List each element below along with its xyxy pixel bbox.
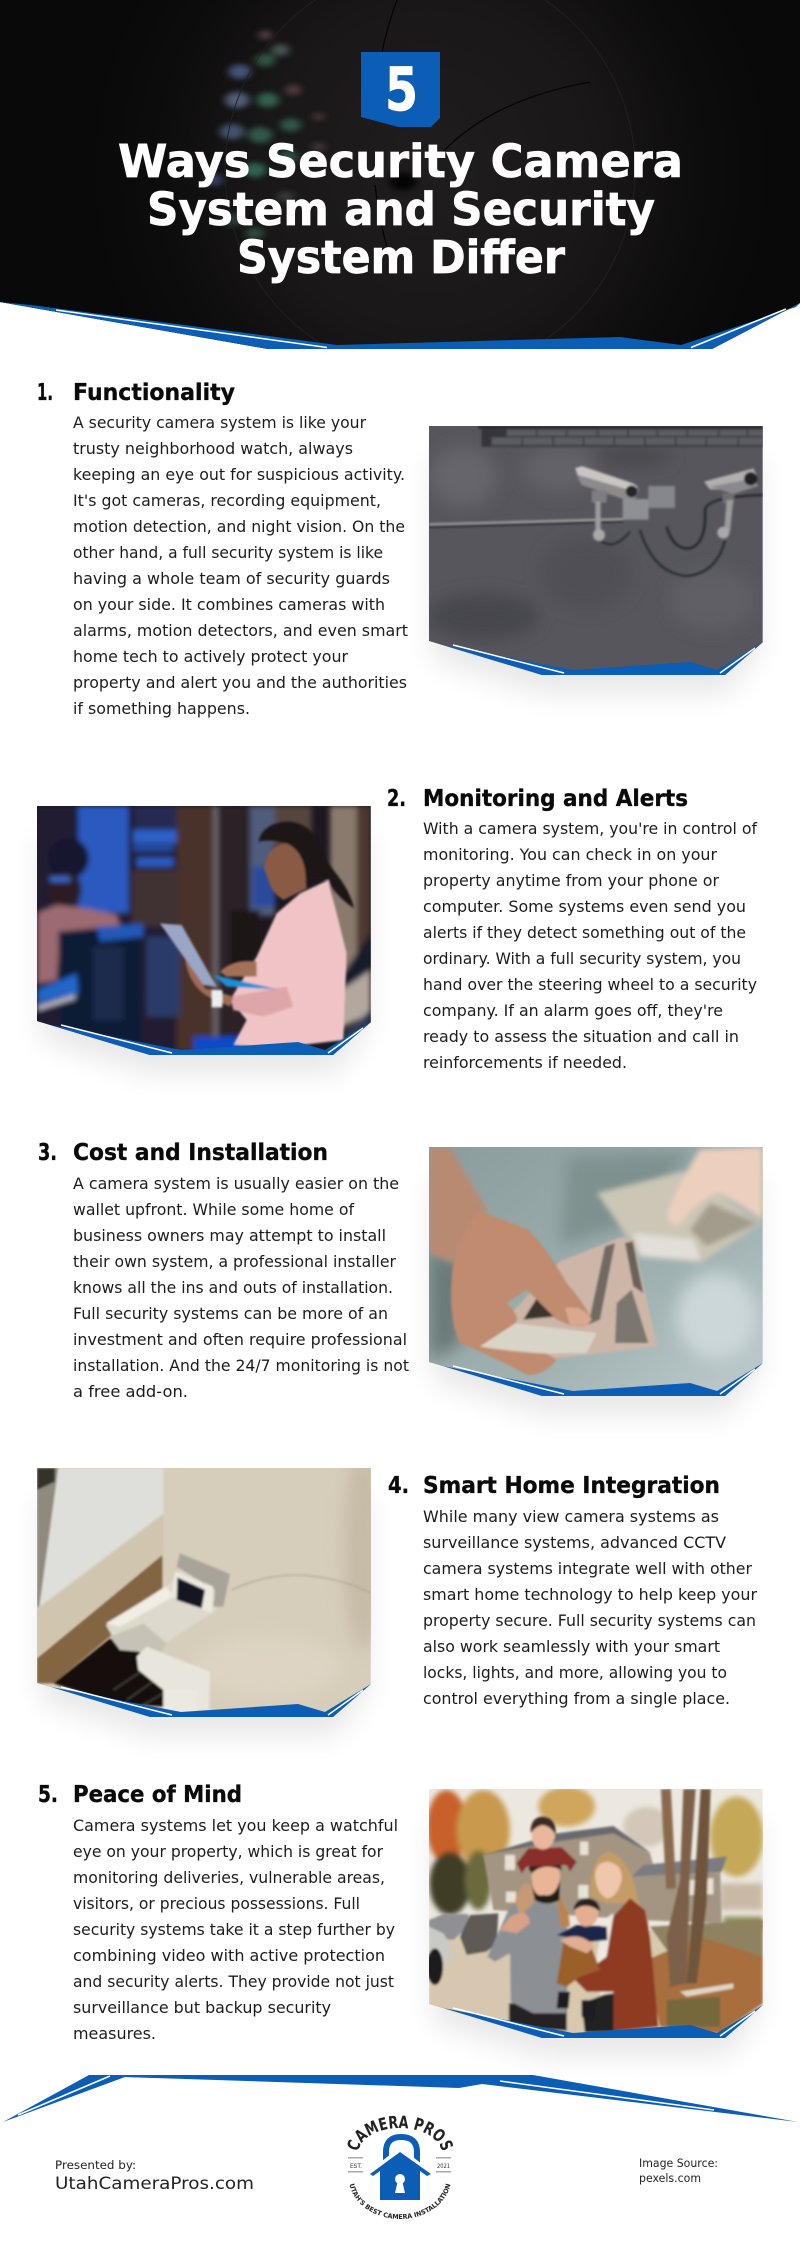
body text 2: ordinary. With a full security system, you <box>423 949 741 968</box>
body text 1: if something happens. <box>73 699 250 718</box>
body text 2 <box>423 819 757 1072</box>
heading 4: Smart Home Integration <box>423 1473 720 1499</box>
photo: security cameras on grey wall <box>427 426 763 694</box>
body text 1: keeping an eye out for suspicious activity. <box>73 465 405 484</box>
logo: Camera Pros: EST. <box>350 2162 362 2170</box>
header banner <box>0 0 800 375</box>
body text 4: camera systems integrate well with other <box>423 1559 752 1578</box>
body text 4: surveillance systems, advanced CCTV <box>423 1533 726 1552</box>
heading 3: 3. <box>38 1140 57 1166</box>
header photo: camera lens <box>0 0 800 375</box>
body text 4: locks, lights, and more, allowing you to <box>423 1663 727 1682</box>
body text 1: A security camera system is like your <box>73 413 366 432</box>
body text 5: surveillance but backup security <box>73 1998 331 2017</box>
body text 2: monitoring. You can check in on your <box>423 845 717 864</box>
heading 5: 5. <box>38 1782 58 1808</box>
body text 5: measures. <box>73 2024 156 2043</box>
body text 2: With a camera system, you're in control of <box>423 819 757 838</box>
presented by <box>55 2158 254 2194</box>
body text 4: property secure. Full security systems can <box>423 1611 756 1630</box>
body text 3: business owners may attempt to install <box>73 1226 386 1245</box>
body text 2: ready to assess the situation and call in <box>423 1027 739 1046</box>
photo: white dome camera on beige wall <box>37 1450 383 1736</box>
body text 5: combining video with active protection <box>73 1946 385 1965</box>
footer <box>3 2075 798 2219</box>
body text 4: While many view camera systems as <box>423 1507 719 1526</box>
body text 3: a free add-on. <box>73 1382 188 1401</box>
body text 3: knows all the ins and outs of installation. <box>73 1278 393 1297</box>
body text 3: Full security systems can be more of an <box>73 1304 388 1323</box>
title: Ways Security Camera <box>118 135 683 188</box>
body text 1: home tech to actively protect your <box>73 647 348 666</box>
body text 2: reinforcements if needed. <box>423 1053 627 1072</box>
image source <box>639 2156 718 2185</box>
heading 1: 1. <box>37 380 53 406</box>
body text 3: installation. And the 24/7 monitoring is not <box>73 1356 409 1375</box>
body text 4 <box>423 1507 757 1708</box>
body text 5: security systems take it a step further by <box>73 1920 395 1939</box>
title: System and Security <box>147 183 655 236</box>
heading 3: Cost and Installation <box>73 1140 328 1166</box>
title <box>118 135 683 284</box>
photo: woman with laptop in server room <box>37 806 371 1074</box>
body text 3: wallet upfront. While some home of <box>73 1200 354 1219</box>
body text 5 <box>73 1816 398 2043</box>
body text 2: alerts if they detect something out of the <box>423 923 746 942</box>
logo: Camera Pros: UTAH'S BEST CAMERA INSTALLATION <box>350 2184 450 2219</box>
image source: pexels.com <box>639 2171 701 2185</box>
section 2: monitoring and alerts <box>37 786 757 1074</box>
body text 1: having a whole team of security guards <box>73 569 390 588</box>
body text 1 <box>73 413 408 718</box>
section 1: functionality <box>37 380 763 718</box>
image source: Image Source: <box>639 2156 718 2170</box>
section 4: smart home integration <box>37 1450 757 1736</box>
logo: Camera Pros: 2021 <box>437 2162 450 2170</box>
body text 1: on your side. It combines cameras with <box>73 595 385 614</box>
header blue swoosh <box>0 302 800 349</box>
heading 2: 2. <box>387 786 406 812</box>
title: System Differ <box>237 231 566 284</box>
body text 5: eye on your property, which is great for <box>73 1842 383 1861</box>
number badge <box>361 52 440 127</box>
logo: Camera Pros <box>348 2116 453 2219</box>
body text 5: Camera systems let you keep a watchful <box>73 1816 398 1835</box>
body text 1: motion detection, and night vision. On the <box>73 517 405 536</box>
photo: hands counting dollar bills <box>429 1147 763 1415</box>
presented by: UtahCameraPros.com <box>55 2174 254 2194</box>
body text 3: their own system, a professional installer <box>73 1252 396 1271</box>
body text 5: and security alerts. They provide not just <box>73 1972 394 1991</box>
heading 2: Monitoring and Alerts <box>423 786 688 812</box>
number badge: 5 <box>385 55 418 125</box>
body text 3 <box>73 1174 409 1401</box>
body text 4: smart home technology to help keep your <box>423 1585 757 1604</box>
body text 5: visitors, or precious possessions. Full <box>73 1894 360 1913</box>
body text 4: control everything from a single place. <box>423 1689 730 1708</box>
footer blue swoosh <box>3 2075 798 2122</box>
section 5: peace of mind <box>38 1782 763 2057</box>
presented by: Presented by: <box>55 2158 136 2172</box>
photo: family in front of house <box>427 1787 763 2057</box>
body text 1: property and alert you and the authorities <box>73 673 407 692</box>
heading 1: Functionality <box>73 380 235 406</box>
heading 5: Peace of Mind <box>73 1782 242 1808</box>
body text 2: company. If an alarm goes off, they're <box>423 1001 723 1020</box>
body text 2: computer. Some systems even send you <box>423 897 746 916</box>
body text 2: hand over the steering wheel to a security <box>423 975 757 994</box>
body text 1: alarms, motion detectors, and even smart <box>73 621 408 640</box>
body text 5: monitoring deliveries, vulnerable areas, <box>73 1868 385 1887</box>
heading 4: 4. <box>388 1473 409 1499</box>
body text 1: trusty neighborhood watch, always <box>73 439 353 458</box>
body text 4: also work seamlessly with your smart <box>423 1637 720 1656</box>
body text 3: A camera system is usually easier on the <box>73 1174 399 1193</box>
body text 3: investment and often require professional <box>73 1330 407 1349</box>
body text 1: It's got cameras, recording equipment, <box>73 491 381 510</box>
body text 2: property anytime from your phone or <box>423 871 719 890</box>
section 3: cost and installation <box>38 1140 763 1415</box>
body text 1: other hand, a full security system is like <box>73 543 383 562</box>
logo: Camera Pros: CAMERA PROS <box>348 2116 453 2150</box>
